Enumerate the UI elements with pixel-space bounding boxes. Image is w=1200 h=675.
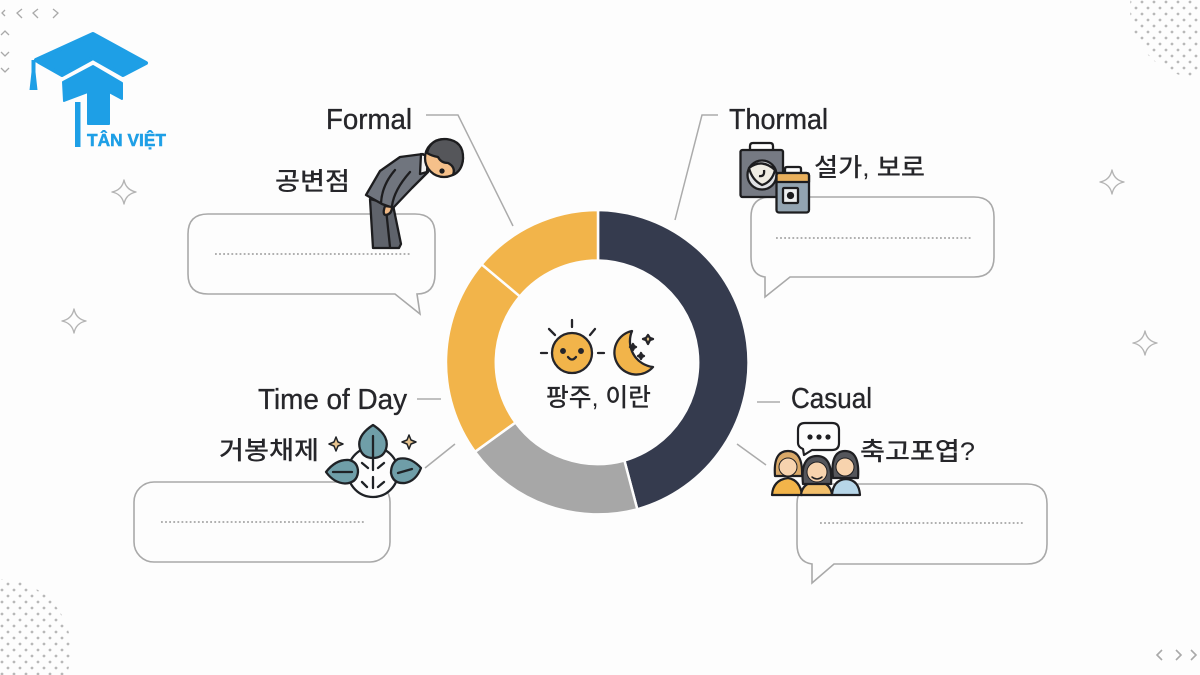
- logo: Tân Việt: [30, 34, 166, 150]
- panel: casual speech bubble: [797, 484, 1047, 583]
- logo tassel: [30, 60, 38, 90]
- panel: time of day speech bubble: [134, 482, 390, 562]
- icon: bowing person: [366, 139, 463, 248]
- sparkle icons: [62, 170, 1157, 355]
- logo arrow: [63, 66, 122, 124]
- label: time of day korean: 거봉채제: [219, 437, 319, 465]
- heading: Thormal: Thormal: [729, 104, 828, 136]
- heading: Formal: Formal: [326, 104, 412, 136]
- label: centre korean: 팡주, 이란: [546, 384, 651, 412]
- label: casual korean: 축고포엽?: [860, 438, 975, 466]
- segment: time of day orange: [446, 264, 520, 452]
- icon: moon with stars: [614, 331, 653, 375]
- icon: leaves: [326, 425, 421, 497]
- connector lines: [417, 115, 780, 468]
- segment: grey: [475, 422, 637, 514]
- logo pole: [75, 102, 80, 147]
- icon: sun: [541, 320, 604, 373]
- panel: formal speech bubble: [188, 214, 435, 314]
- heading: Time of Day: Time of Day: [258, 384, 407, 416]
- label: thormal korean: 설가, 보로: [814, 154, 925, 182]
- logo mortarboard: [36, 34, 146, 75]
- icon: bags: [740, 143, 809, 212]
- segment: casual navy: [598, 210, 749, 509]
- heading: Casual: Casual: [791, 383, 872, 415]
- segment: formal orange: [482, 210, 598, 296]
- logo wordmark: TÂN VIỆT: [87, 129, 166, 150]
- label: formal korean: 공변점: [275, 168, 350, 196]
- donut chart: [446, 210, 749, 514]
- panel: thormal speech bubble: [751, 197, 994, 297]
- icon: group of people: [772, 423, 860, 495]
